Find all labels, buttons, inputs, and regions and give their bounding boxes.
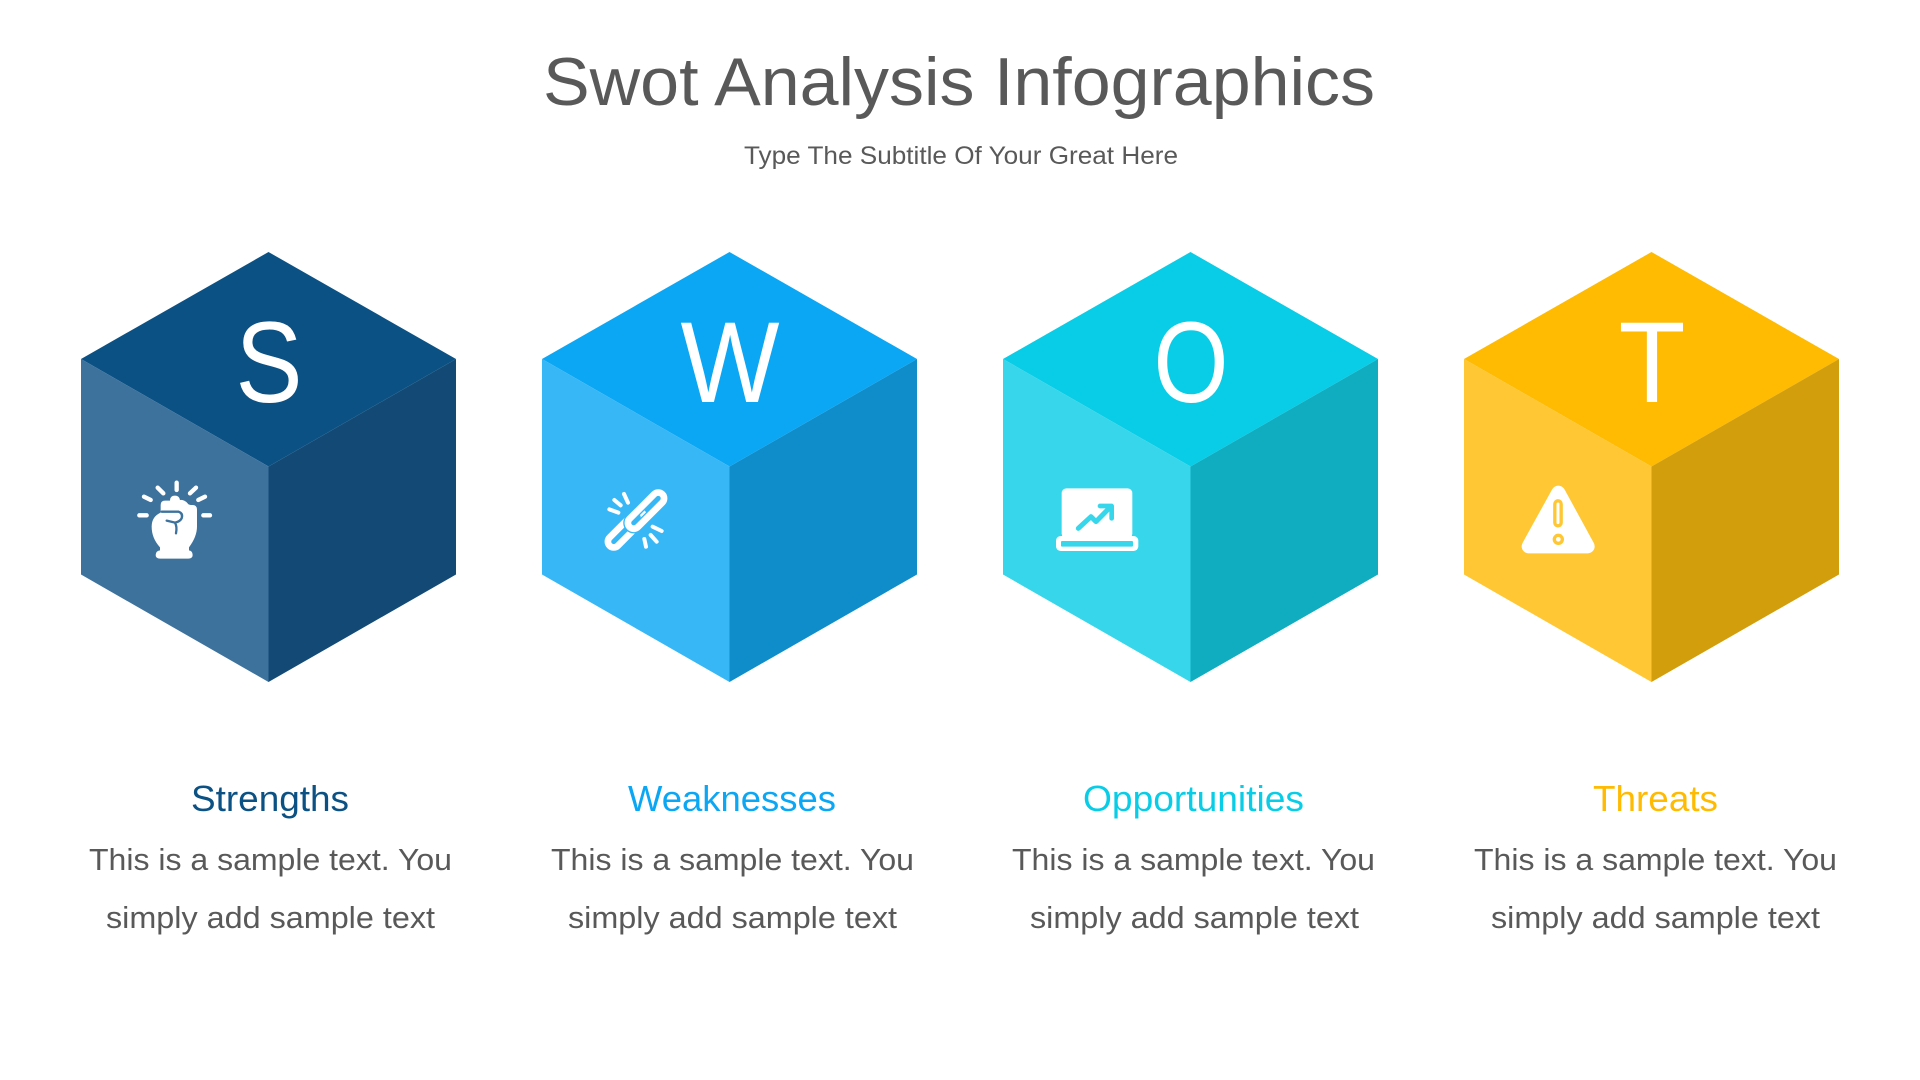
icon: broken chain link: [605, 490, 666, 550]
panel: strengths cube: [81, 252, 456, 682]
description line 1: This is a sample text. You: [551, 842, 914, 877]
icon: laptop with growth arrow: [1056, 488, 1138, 551]
letter S: S: [236, 299, 302, 427]
description line 1: This is a sample text. You: [1012, 842, 1375, 877]
subtitle: Type The Subtitle Of Your Great Here: [744, 142, 1178, 170]
text block: weaknesses: [551, 778, 914, 935]
heading: weaknesses: Weaknesses: [628, 778, 836, 819]
cube left face: [542, 359, 730, 682]
cube top face: [1003, 252, 1378, 466]
description line 2: simply add sample text: [1030, 900, 1359, 935]
description line 1: This is a sample text. You: [1474, 842, 1837, 877]
text block: threats: [1474, 778, 1837, 935]
cube right face: [268, 359, 456, 682]
cube right face: [730, 359, 917, 682]
cube left face: [1464, 359, 1652, 682]
heading: strengths: Strengths: [191, 778, 349, 819]
cube left face: [81, 359, 268, 682]
title: Swot Analysis Infographics: [543, 44, 1375, 120]
description line 2: simply add sample text: [106, 900, 435, 935]
cube top face: [542, 252, 917, 466]
text block: opportunities: [1012, 778, 1375, 935]
heading: opportunities: Opportunities: [1083, 778, 1304, 819]
cube right face: [1190, 359, 1378, 682]
text block: strengths: [89, 778, 452, 935]
letter O: O: [1154, 299, 1228, 427]
description line 2: simply add sample text: [1491, 900, 1820, 935]
cube right face: [1652, 359, 1839, 682]
cube left face: [1003, 359, 1190, 682]
heading: threats: Threats: [1593, 778, 1718, 819]
icon: warning triangle: [1529, 493, 1588, 546]
letter T: T: [1618, 299, 1686, 427]
cube top face: [81, 252, 456, 466]
letter W: W: [680, 299, 780, 427]
panel: weaknesses cube: [542, 252, 917, 682]
icon: fist: [139, 483, 210, 559]
panel: threats cube: [1464, 252, 1839, 682]
description line 2: simply add sample text: [568, 900, 897, 935]
panel: opportunities cube: [1003, 252, 1378, 682]
cube top face: [1464, 252, 1839, 466]
description line 1: This is a sample text. You: [89, 842, 452, 877]
